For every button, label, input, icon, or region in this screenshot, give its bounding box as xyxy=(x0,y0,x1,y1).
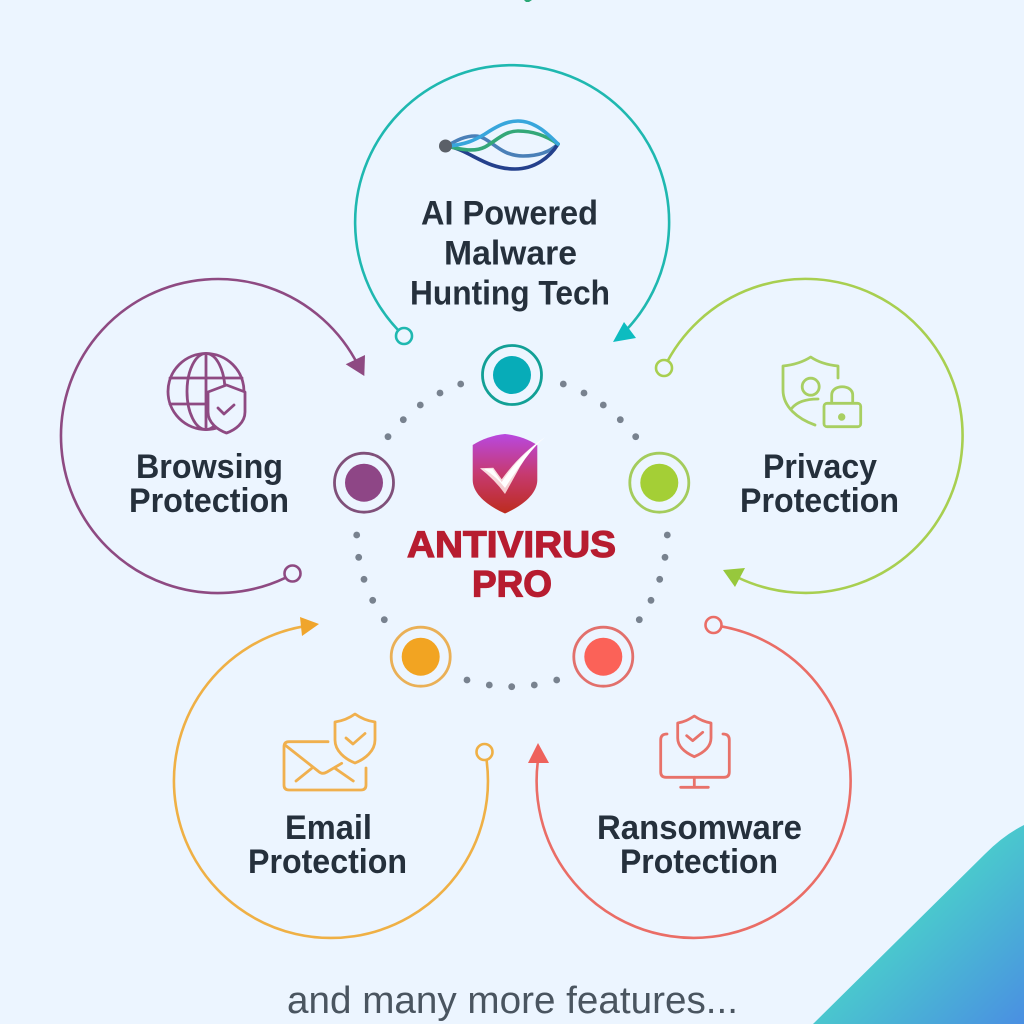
icon: globe with shield xyxy=(168,354,245,433)
heading: Privacy Protection: Protection xyxy=(740,482,899,520)
dotted ring xyxy=(353,381,671,690)
panel: browsing protection xyxy=(61,279,365,593)
arc start: red xyxy=(706,617,722,633)
heading: Privacy Protection xyxy=(740,448,899,520)
heading: Ransomware Protection xyxy=(597,809,802,881)
node: purple xyxy=(334,453,394,512)
corner gradient shape xyxy=(813,825,1024,1024)
panel: email protection xyxy=(174,617,492,938)
icon: AI waves xyxy=(439,121,558,169)
arrow: green xyxy=(723,568,745,587)
arc: red loop xyxy=(537,626,851,938)
panel: AI powered malware hunting xyxy=(355,65,669,344)
icon: envelope with shield xyxy=(284,714,375,790)
heading: Browsing Protection xyxy=(129,448,289,520)
title: ANTIVIRUS PRO: PRO xyxy=(472,564,552,604)
logo: antivirus pro shield xyxy=(473,434,545,514)
heading: Email Protection: Protection xyxy=(248,843,407,881)
footer text: and many more features... xyxy=(287,980,738,1022)
panel: ransomware protection xyxy=(528,617,851,938)
node: red xyxy=(574,627,633,686)
heading: AI Powered Malware Hunting Tech: Malware xyxy=(444,234,577,272)
heading: AI Powered Malware Hunting Tech xyxy=(410,194,610,312)
arc: orange loop xyxy=(174,626,488,938)
node: teal xyxy=(482,346,542,404)
arrow: orange xyxy=(300,617,319,636)
heading: Browsing Protection: Protection xyxy=(129,482,289,520)
heading: AI Powered Malware Hunting Tech: Hunting Tech xyxy=(410,274,610,312)
heading: Privacy Protection: Privacy xyxy=(763,448,877,486)
arc start: purple xyxy=(284,566,300,582)
heading: Email Protection xyxy=(248,809,407,881)
icon: monitor with shield xyxy=(661,716,729,787)
arrow: red xyxy=(528,743,549,763)
arc start: teal xyxy=(396,328,412,344)
arc start: green xyxy=(656,360,672,376)
title: ANTIVIRUS PRO xyxy=(407,524,616,604)
node: green xyxy=(630,453,689,512)
arrow: teal xyxy=(613,322,636,342)
heading: Ransomware Protection: Protection xyxy=(620,843,778,881)
title: ANTIVIRUS PRO: ANTIVIRUS xyxy=(407,524,616,565)
arc: green loop xyxy=(664,279,963,593)
arc: teal loop xyxy=(355,65,669,339)
arc start: orange xyxy=(476,744,492,760)
heading: Browsing Protection: Browsing xyxy=(136,448,283,486)
arrow: purple xyxy=(346,355,365,376)
heading: Email Protection: Email xyxy=(285,809,372,847)
heading: AI Powered Malware Hunting Tech: AI Powered xyxy=(421,194,598,232)
arc: purple loop xyxy=(61,279,358,593)
top edge green speck xyxy=(524,0,532,2)
node: orange xyxy=(391,627,450,686)
icon: shield with person and lock xyxy=(783,357,861,427)
panel: privacy protection xyxy=(656,279,963,593)
heading: Ransomware Protection: Ransomware xyxy=(597,809,802,847)
